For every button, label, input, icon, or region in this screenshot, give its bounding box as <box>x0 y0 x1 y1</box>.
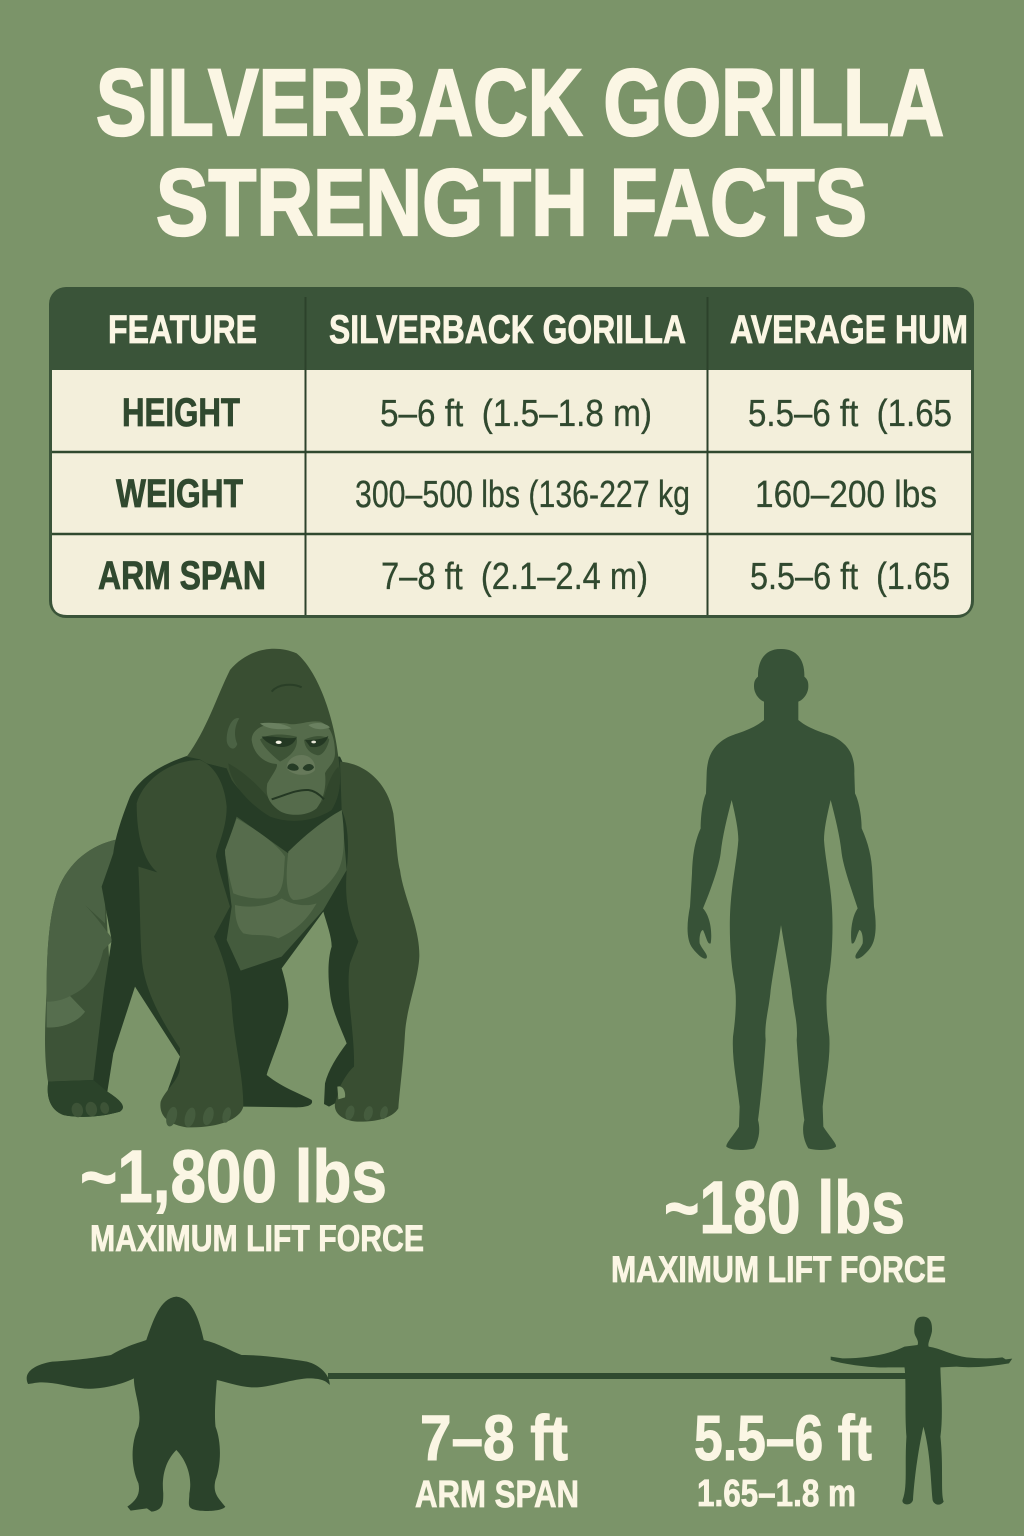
row: height: 5–6 ft (1.5–1.8 m) <box>380 393 652 435</box>
human silhouette <box>688 649 876 1150</box>
row: height: 5.5–6 ft (1.65 <box>748 393 952 435</box>
table header row <box>108 308 968 352</box>
right arm <box>335 762 419 1122</box>
human arm span silhouette <box>831 1317 1012 1505</box>
pectorals and abdomen <box>225 810 344 938</box>
gorilla arm span label: 7–8 ft <box>420 1402 568 1474</box>
hind leg <box>45 839 117 1083</box>
human lift stat: ~180 lbs <box>664 1166 905 1249</box>
row: arm span: ARM SPAN <box>98 554 266 598</box>
row: arm span <box>98 554 950 598</box>
gorilla lift stat <box>80 1135 424 1259</box>
gorilla arm span label <box>415 1402 579 1516</box>
human lift stat: MAXIMUM LIFT FORCE <box>611 1249 946 1290</box>
torso <box>225 810 347 971</box>
row: height: HEIGHT <box>122 391 240 435</box>
gorilla arm span silhouette <box>27 1297 330 1512</box>
table header row: FEATURE <box>108 308 257 352</box>
mouth <box>272 790 324 799</box>
human arm span label: 1.65–1.8 m <box>697 1473 856 1515</box>
human arm span label: 5.5–6 ft <box>694 1402 872 1474</box>
hind toes <box>70 1101 110 1118</box>
finger details <box>164 1104 389 1128</box>
gorilla lift stat: ~1,800 lbs <box>80 1135 387 1218</box>
hand gap <box>337 1086 345 1099</box>
ear <box>227 718 239 749</box>
comparison table <box>49 287 974 618</box>
row: weight <box>116 472 937 516</box>
gorilla arm span label: ARM SPAN <box>415 1474 579 1516</box>
brow ridge <box>272 685 302 692</box>
neck shadow <box>228 763 340 821</box>
arm span comparison line <box>328 1373 910 1379</box>
row: arm span: 7–8 ft (2.1–2.4 m) <box>381 556 648 598</box>
human arm span label <box>694 1402 872 1515</box>
dark body base <box>48 755 363 1117</box>
left arm <box>137 760 243 1127</box>
human lift stat <box>611 1166 946 1290</box>
face <box>252 721 335 815</box>
nose <box>287 755 315 775</box>
table header row: SILVERBACK GORILLA <box>329 308 686 352</box>
title <box>96 50 944 256</box>
gorilla lift stat: MAXIMUM LIFT FORCE <box>90 1218 424 1259</box>
title: STRENGTH FACTS <box>156 150 867 256</box>
row: weight: WEIGHT <box>116 472 243 516</box>
gorilla illustration <box>45 649 419 1128</box>
table header row: AVERAGE HUM <box>730 308 968 352</box>
row: weight: 160–200 lbs <box>755 474 937 516</box>
row: weight: 300–500 lbs (136-227 kg <box>355 474 690 516</box>
row: height <box>122 391 952 435</box>
row: arm span: 5.5–6 ft (1.65 <box>750 556 950 598</box>
head <box>187 649 340 821</box>
